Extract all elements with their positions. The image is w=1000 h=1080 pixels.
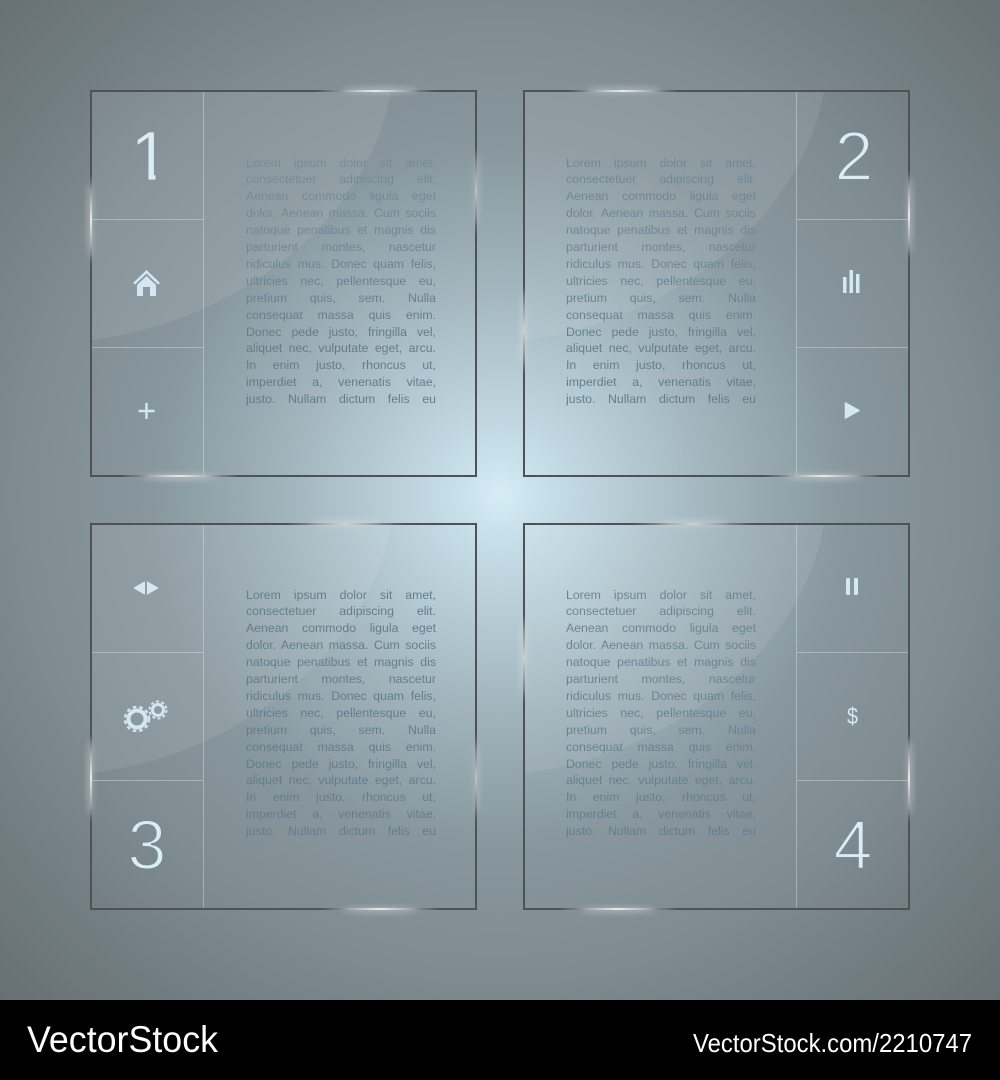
- icon: bar chart: [843, 270, 860, 293]
- footer url text: VectorStock.com/2210747: [693, 1028, 972, 1058]
- footer bar: [27, 1019, 972, 1060]
- body text: pretium quis, sem. Nulla: [566, 291, 756, 305]
- number 4: [836, 822, 870, 868]
- body text: justo. Nullam dictum felis eu: [566, 392, 756, 406]
- body text: [566, 586, 756, 840]
- body text: justo. Nullam dictum felis eu: [566, 824, 756, 838]
- number 1: [138, 132, 156, 180]
- body text: In enim justo, rhoncus ut,: [246, 790, 436, 804]
- body text: natoque penatibus et magnis dis: [566, 655, 756, 669]
- body text: Lorem ipsum dolor sit amet,: [566, 588, 756, 602]
- body text: dolor. Aenean massa. Cum sociis: [566, 206, 756, 220]
- body text: Donec pede justo, fringilla vel,: [566, 757, 756, 771]
- body text: natoque penatibus et magnis dis: [246, 223, 436, 237]
- number 2: [839, 132, 869, 179]
- body text: [566, 154, 756, 408]
- frame: [91, 91, 476, 476]
- body text: pretium quis, sem. Nulla: [246, 291, 436, 305]
- body text: In enim justo, rhoncus ut,: [566, 790, 756, 804]
- icon: pause: [846, 578, 858, 595]
- body text: consequat massa quis enim.: [246, 740, 436, 754]
- body text: ridiculus mus. Donec quam felis,: [566, 689, 756, 703]
- icon: home: [133, 270, 160, 296]
- frame: [524, 524, 909, 909]
- body text: imperdiet a, venenatis vitae,: [566, 807, 756, 821]
- body text: Donec pede justo, fringilla vel,: [566, 325, 756, 339]
- panel 3: [85, 520, 480, 915]
- body text: ultricies nec, pellentesque eu,: [566, 706, 756, 720]
- body text: Lorem ipsum dolor sit amet,: [566, 156, 756, 170]
- body text: ultricies nec, pellentesque eu,: [246, 706, 436, 720]
- body text: dolor. Aenean massa. Cum sociis: [566, 638, 756, 652]
- body text: Donec pede justo, fringilla vel,: [246, 757, 436, 771]
- panel 2: [520, 85, 915, 482]
- body text: ridiculus mus. Donec quam felis,: [246, 689, 436, 703]
- body text: imperdiet a, venenatis vitae,: [566, 375, 756, 389]
- body text: parturient montes, nascetur: [246, 240, 436, 254]
- body text: ridiculus mus. Donec quam felis,: [246, 257, 436, 271]
- body text: consequat massa quis enim.: [566, 740, 756, 754]
- dividers: [92, 92, 204, 475]
- glass gloss: [524, 525, 824, 773]
- body text: justo. Nullam dictum felis eu: [246, 392, 436, 406]
- footer logo text: VectorStock: [27, 1019, 218, 1060]
- frame: [524, 91, 909, 476]
- body text: Lorem ipsum dolor sit amet,: [246, 156, 436, 170]
- panel 1: [84, 85, 480, 482]
- body text: Donec pede justo, fringilla vel,: [246, 325, 436, 339]
- body text: consequat massa quis enim.: [566, 308, 756, 322]
- dividers: [92, 525, 204, 908]
- frame highlights: [520, 520, 913, 913]
- body text: ultricies nec, pellentesque eu,: [566, 274, 756, 288]
- body text: consectetuer adipiscing elit.: [246, 604, 436, 618]
- body text: [246, 586, 436, 840]
- body text: pretium quis, sem. Nulla: [246, 723, 436, 737]
- dividers: [796, 525, 908, 908]
- body text: ridiculus mus. Donec quam felis,: [566, 257, 756, 271]
- body text: aliquet nec, vulputate eget, arcu.: [566, 773, 756, 787]
- body text: In enim justo, rhoncus ut,: [566, 358, 756, 372]
- body text: aliquet nec, vulputate eget, arcu.: [246, 773, 436, 787]
- icon: play: [846, 403, 859, 418]
- body text: consectetuer adipiscing elit.: [566, 172, 756, 186]
- body text: justo. Nullam dictum felis eu: [246, 824, 436, 838]
- frame highlights: [520, 87, 913, 480]
- glass gloss: [91, 525, 391, 773]
- frame highlights: [87, 87, 480, 480]
- body text: [246, 154, 436, 408]
- number 3: [130, 821, 162, 868]
- body text: consectetuer adipiscing elit.: [566, 604, 756, 618]
- body text: dolor. Aenean massa. Cum sociis: [246, 206, 436, 220]
- frame highlights: [87, 520, 480, 913]
- body text: Aenean commodo ligula eget: [246, 189, 436, 203]
- frame: [91, 524, 476, 909]
- body text: Aenean commodo ligula eget: [246, 621, 436, 635]
- body text: aliquet nec, vulputate eget, arcu.: [246, 341, 436, 355]
- icon: plus: [138, 403, 154, 419]
- body text: Aenean commodo ligula eget: [566, 621, 756, 635]
- body text: parturient montes, nascetur: [566, 240, 756, 254]
- body text: pretium quis, sem. Nulla: [566, 723, 756, 737]
- icon: dollar: $: [847, 703, 858, 729]
- body text: Aenean commodo ligula eget: [566, 189, 756, 203]
- body text: parturient montes, nascetur: [246, 672, 436, 686]
- body text: natoque penatibus et magnis dis: [246, 655, 436, 669]
- body text: natoque penatibus et magnis dis: [566, 223, 756, 237]
- body text: imperdiet a, venenatis vitae,: [246, 375, 436, 389]
- body text: parturient montes, nascetur: [566, 672, 756, 686]
- panel 4: [520, 519, 915, 915]
- body text: consequat massa quis enim.: [246, 308, 436, 322]
- glass gloss: [91, 92, 391, 340]
- icon: gears: [125, 702, 166, 731]
- glass gloss: [524, 92, 824, 340]
- body text: consectetuer adipiscing elit.: [246, 172, 436, 186]
- body text: Lorem ipsum dolor sit amet,: [246, 588, 436, 602]
- icon: left right arrows: [134, 582, 158, 594]
- body text: In enim justo, rhoncus ut,: [246, 358, 436, 372]
- body text: dolor. Aenean massa. Cum sociis: [246, 638, 436, 652]
- dividers: [796, 92, 908, 475]
- body text: ultricies nec, pellentesque eu,: [246, 274, 436, 288]
- body text: imperdiet a, venenatis vitae,: [246, 807, 436, 821]
- body text: aliquet nec, vulputate eget, arcu.: [566, 341, 756, 355]
